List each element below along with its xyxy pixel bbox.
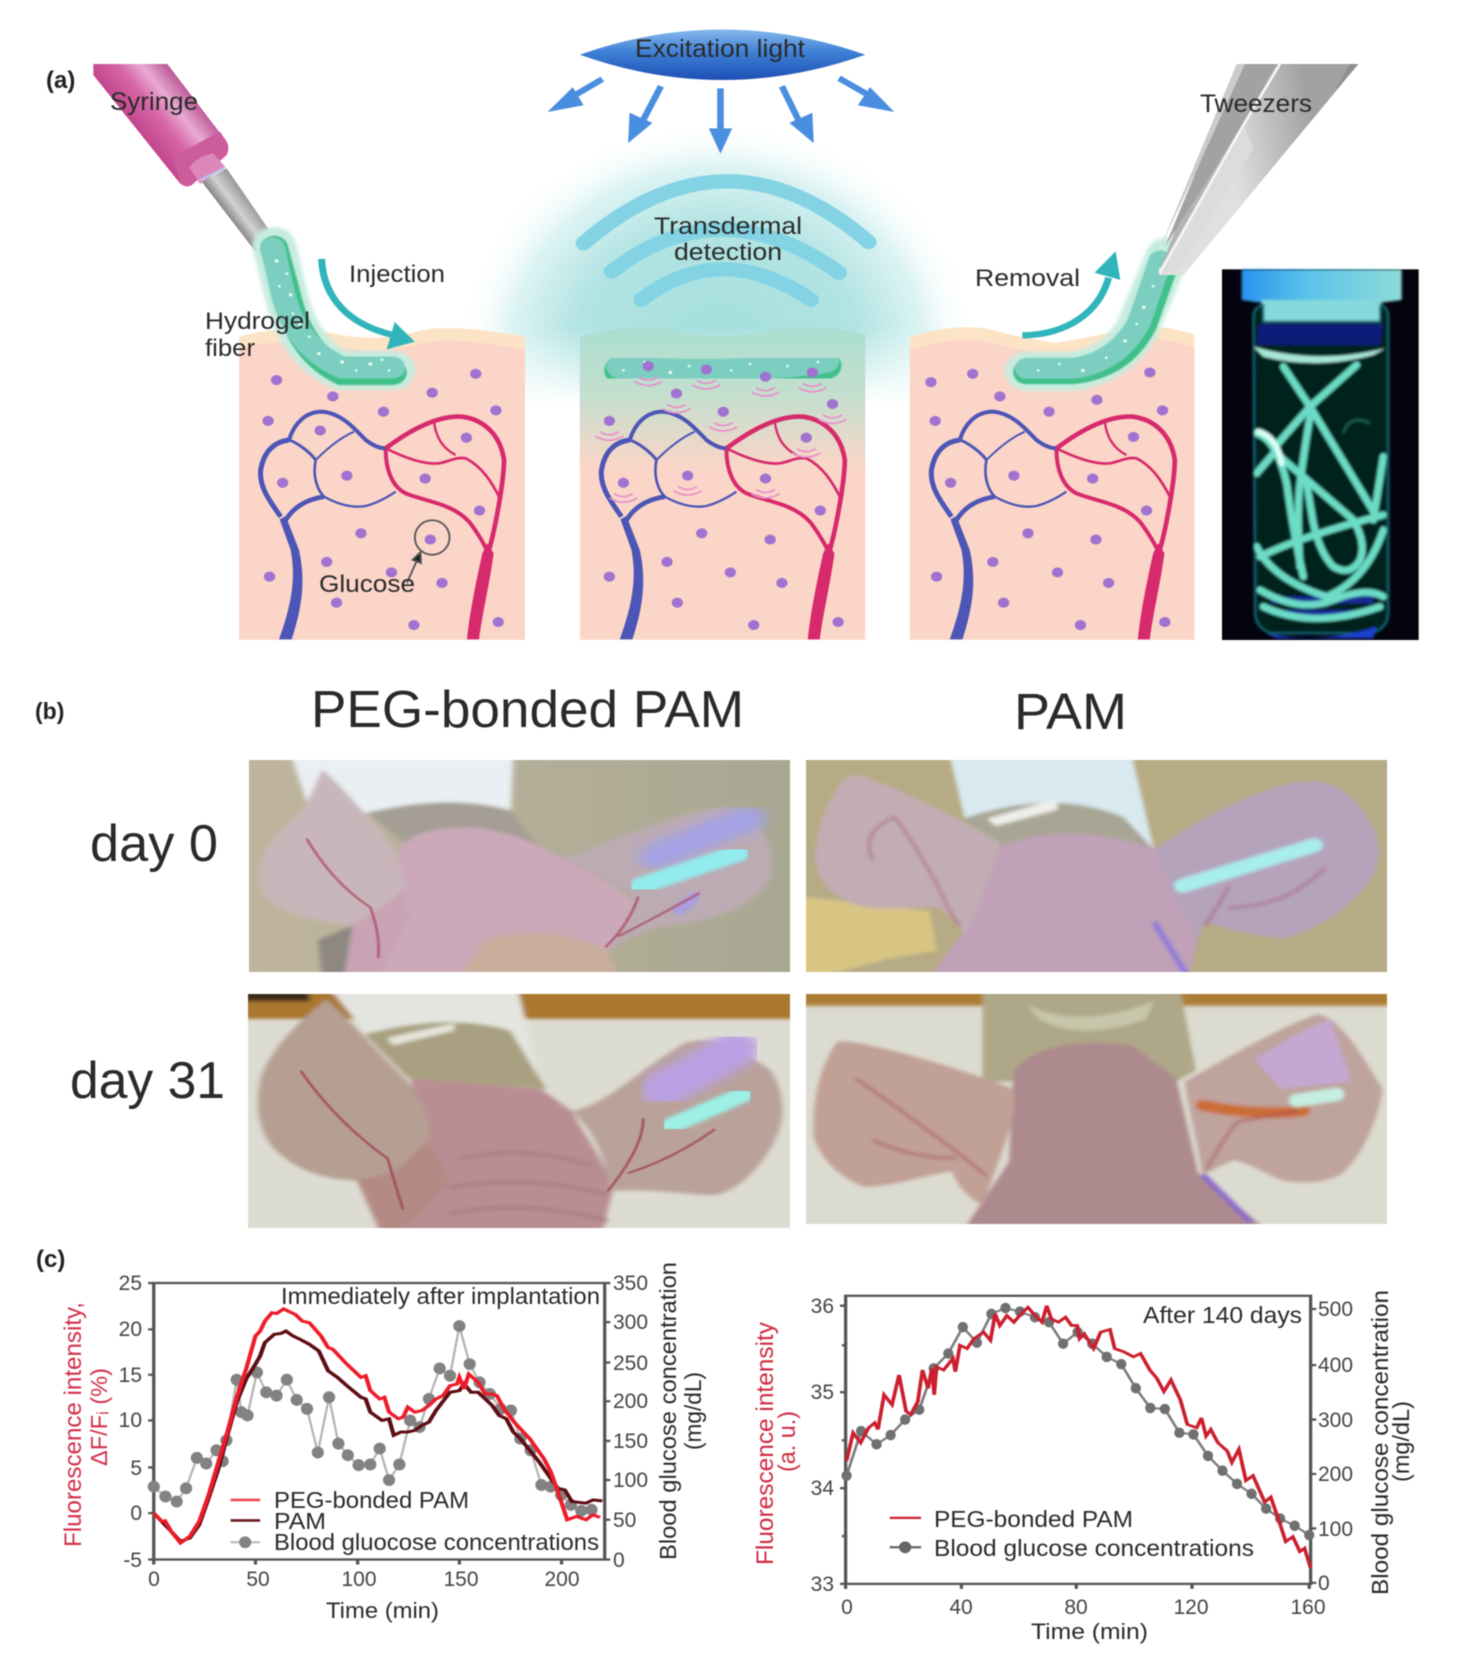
panel c: fluorescence charts bbox=[36, 1246, 1414, 1644]
hydrogel fiber in injection panel bbox=[273, 246, 394, 372]
annotation labels for panel a: Glucose bbox=[319, 571, 415, 598]
left axis tick labels: -5 bbox=[123, 1549, 142, 1572]
chart caption: Immediately after implantation bbox=[281, 1283, 600, 1309]
right axis tick labels: 300 bbox=[1318, 1409, 1353, 1432]
annotation labels for panel a: Transdermal bbox=[654, 213, 802, 240]
annotation labels for panel a: Removal bbox=[975, 265, 1080, 292]
legend: PAM bbox=[274, 1508, 326, 1534]
chart: after 140 days bbox=[752, 1290, 1414, 1644]
excitation light lens bbox=[580, 29, 865, 80]
right y axis title: (mg/dL) bbox=[680, 1372, 706, 1450]
legend: PEG-bonded PAM bbox=[934, 1506, 1133, 1532]
schematic artwork bbox=[93, 29, 1358, 640]
x axis tick labels: 0 bbox=[148, 1568, 160, 1591]
left y axis title: Fluorescence intensity, bbox=[60, 1302, 87, 1547]
photo: PEG-bonded PAM day 31 bbox=[247, 993, 791, 1229]
left axis tick labels bbox=[119, 1272, 142, 1572]
plot lines and frame bbox=[148, 1283, 610, 1564]
row label day 31: day 31 bbox=[70, 1052, 225, 1110]
left y axis title: Fluorescence intensity bbox=[752, 1322, 779, 1565]
x axis tick labels: 160 bbox=[1290, 1596, 1326, 1619]
chart: immediately after implantation bbox=[60, 1262, 706, 1623]
glow behind transdermal detection bbox=[486, 144, 949, 395]
left axis tick labels: 5 bbox=[130, 1457, 142, 1480]
annotation labels for panel a: detection bbox=[674, 239, 782, 266]
right axis tick labels: 0 bbox=[613, 1549, 625, 1572]
glowing fiber day 31 bbox=[301, 1049, 743, 1210]
annotation labels for panel a: Tweezers bbox=[1200, 90, 1312, 118]
left axis tick labels: 25 bbox=[119, 1272, 142, 1295]
annotation labels for panel a: Hydrogel bbox=[205, 308, 310, 335]
right y axis title: (mg/dL) bbox=[1388, 1401, 1414, 1482]
column heading PAM: PAM bbox=[1014, 683, 1127, 740]
panel a: transdermal glucose detection schematic bbox=[46, 29, 1419, 640]
detection signal arcs bbox=[584, 181, 869, 300]
light arrows bbox=[548, 78, 894, 154]
left axis tick labels: 15 bbox=[119, 1364, 142, 1387]
hydrogel speckles bbox=[275, 259, 1162, 374]
left y axis title bbox=[60, 1302, 112, 1547]
hydrogel fiber in removal panel bbox=[1027, 257, 1167, 372]
tweezers bbox=[1158, 64, 1358, 275]
signal ripples around glucose bbox=[595, 377, 847, 502]
right axis tick labels: 100 bbox=[613, 1469, 648, 1492]
x axis tick labels bbox=[148, 1568, 580, 1591]
x axis tick labels bbox=[841, 1596, 1326, 1619]
annotation labels for panel a: Syringe bbox=[110, 88, 198, 116]
annotation labels for panel a: Injection bbox=[349, 261, 445, 288]
right axis tick labels bbox=[613, 1272, 648, 1572]
skin panel: removal bbox=[910, 326, 1194, 640]
left axis tick labels: 20 bbox=[119, 1318, 142, 1341]
right axis tick labels: 300 bbox=[613, 1311, 648, 1334]
legend bbox=[934, 1506, 1254, 1561]
right y axis title bbox=[655, 1262, 706, 1560]
skin panel: injection bbox=[239, 328, 525, 640]
label (c): (c) bbox=[36, 1246, 65, 1273]
right axis tick labels: 100 bbox=[1318, 1518, 1353, 1541]
right axis tick labels: 150 bbox=[613, 1430, 648, 1453]
column heading PEG-bonded PAM: PEG-bonded PAM bbox=[311, 681, 744, 739]
legend: Blood gluocose concentrations bbox=[274, 1529, 599, 1555]
hydrogel fiber in detection panel bbox=[620, 361, 826, 375]
legend: PEG-bonded PAM bbox=[274, 1487, 469, 1513]
left y axis title bbox=[752, 1322, 801, 1565]
syringe bbox=[93, 64, 276, 264]
left axis tick labels: 33 bbox=[811, 1573, 834, 1596]
annotation labels for panel a bbox=[110, 35, 1312, 598]
annotation labels for panel a: fiber bbox=[205, 335, 255, 362]
photo: fluorescent fibers in vial bbox=[1222, 269, 1419, 640]
x axis tick labels: 0 bbox=[841, 1596, 853, 1619]
right y axis title: Blood glucose concentration bbox=[1367, 1290, 1393, 1595]
right y axis title: Blood glucose concentration bbox=[655, 1262, 681, 1560]
left y axis title: (a. u.) bbox=[774, 1411, 801, 1472]
x axis tick labels: 150 bbox=[443, 1568, 479, 1591]
x axis tick labels: 100 bbox=[341, 1568, 377, 1591]
x axis title: Time (min) bbox=[1031, 1619, 1148, 1644]
skin panel: transdermal detection bbox=[580, 327, 865, 640]
left y axis title: ΔF/Fᵢ (%) bbox=[86, 1368, 112, 1466]
left axis tick labels: 0 bbox=[130, 1502, 142, 1525]
annotation labels for panel a: Excitation light bbox=[635, 35, 805, 63]
right axis tick labels: 350 bbox=[613, 1272, 648, 1295]
label (b): (b) bbox=[35, 698, 64, 724]
label (a): (a) bbox=[46, 67, 75, 94]
x axis tick labels: 80 bbox=[1064, 1596, 1088, 1619]
x axis title: Time (min) bbox=[326, 1598, 439, 1623]
chart caption: After 140 days bbox=[1143, 1302, 1302, 1328]
right axis tick labels: 50 bbox=[613, 1509, 636, 1532]
left axis tick labels bbox=[811, 1295, 834, 1596]
right y axis title bbox=[1367, 1290, 1414, 1595]
legend bbox=[274, 1487, 599, 1555]
x axis tick labels: 40 bbox=[949, 1596, 973, 1619]
photo: PEG-bonded PAM day 0 bbox=[248, 759, 791, 973]
right axis tick labels: 200 bbox=[1318, 1463, 1353, 1486]
glucose molecules bbox=[262, 361, 1170, 630]
left axis tick labels: 35 bbox=[811, 1381, 834, 1404]
right axis tick labels: 200 bbox=[613, 1390, 648, 1413]
right axis tick labels: 0 bbox=[1318, 1572, 1330, 1595]
panel b: mouse ear photographs bbox=[35, 681, 1391, 1232]
right axis tick labels bbox=[1318, 1298, 1353, 1595]
x axis tick labels: 50 bbox=[246, 1568, 270, 1591]
plot lines and frame bbox=[840, 1296, 1316, 1589]
legend: Blood glucose concentrations bbox=[934, 1535, 1254, 1561]
right axis tick labels: 400 bbox=[1318, 1354, 1353, 1377]
injection arrow bbox=[322, 259, 415, 349]
removal arrow bbox=[1022, 251, 1120, 335]
photo: PAM day 0 bbox=[805, 759, 1388, 973]
x axis tick labels: 120 bbox=[1173, 1596, 1209, 1619]
right axis tick labels: 500 bbox=[1318, 1298, 1353, 1321]
glowing fiber day 0 bbox=[307, 819, 748, 958]
left axis tick labels: 10 bbox=[119, 1409, 142, 1432]
row label day 0: day 0 bbox=[90, 815, 218, 873]
left axis tick labels: 36 bbox=[811, 1295, 834, 1318]
x axis tick labels: 200 bbox=[544, 1568, 580, 1591]
left axis tick labels: 34 bbox=[811, 1477, 834, 1500]
glucose callout circle and pointer bbox=[407, 520, 450, 583]
photo: PAM day 31 bbox=[805, 993, 1388, 1225]
right axis tick labels: 250 bbox=[613, 1352, 648, 1375]
